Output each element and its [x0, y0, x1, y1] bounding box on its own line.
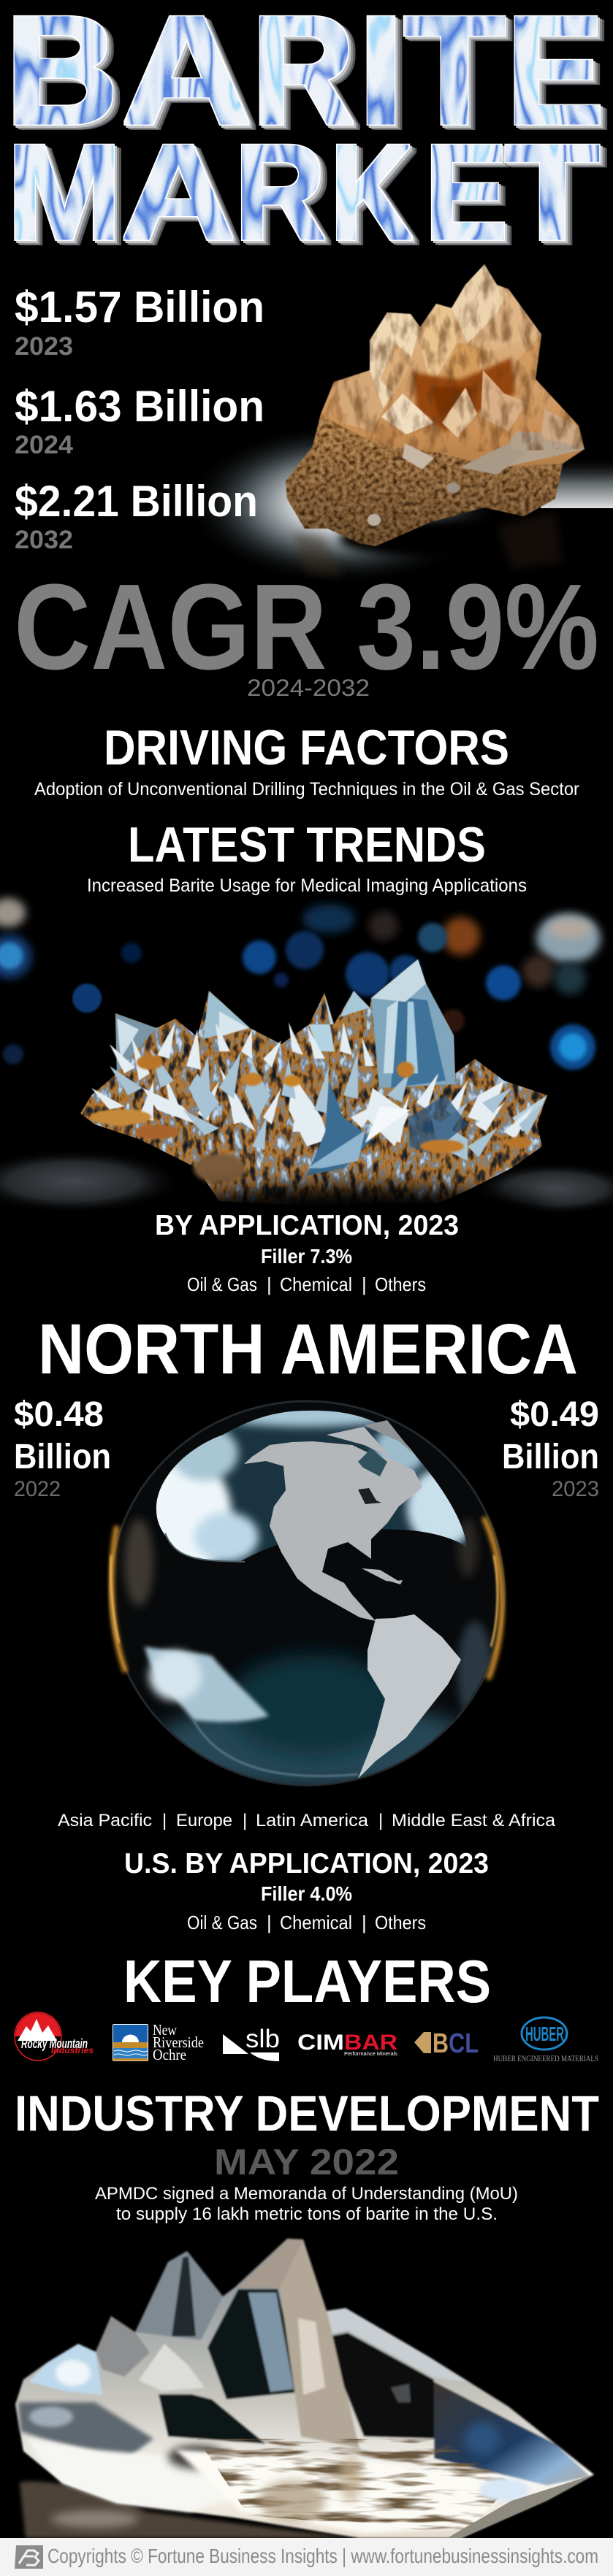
U.S. by application 2023: | — [362, 1912, 367, 1933]
logo: New Riverside Ochre: New — [153, 2021, 178, 2039]
title: Barite Market — [5, 0, 604, 268]
driving factors — [34, 720, 579, 800]
value: North America 2022 — [14, 1395, 111, 1501]
footer logo — [15, 2545, 43, 2569]
by application 2023 — [155, 1210, 459, 1295]
by application 2023: Oil & Gas — [187, 1273, 257, 1295]
value: 2023: 2023 — [15, 332, 73, 361]
logo: Rocky Mountain Industries: Rocky Mountain — [21, 2036, 88, 2051]
regions list: Middle East & Africa — [392, 1811, 556, 1831]
value: 2024 — [15, 382, 264, 459]
by application 2023: | — [267, 1273, 272, 1295]
logo: Cimbar: Performance Minerals — [344, 2052, 398, 2057]
value: North America 2023: Billion — [502, 1438, 599, 1476]
logo: Cimbar: CIM — [297, 2031, 344, 2055]
by application 2023: Filler 7.3% — [261, 1245, 352, 1268]
regions list — [58, 1811, 556, 1831]
logo: Rocky Mountain Industries: Industries — [51, 2045, 94, 2055]
value: 2023 — [15, 283, 264, 361]
title: Barite Market: E — [425, 118, 508, 268]
value: North America 2022: $0.48 — [14, 1395, 104, 1434]
image: orange barite crystal on rock — [186, 264, 613, 584]
logo: Rocky Mountain Industries — [15, 2012, 94, 2061]
logo: Cimbar — [297, 2031, 398, 2057]
U.S. by application 2023: Oil & Gas — [187, 1912, 257, 1933]
latest trends — [87, 817, 527, 896]
regions list: Latin America — [256, 1811, 369, 1831]
logo: Huber Engineered Materials — [493, 2017, 598, 2063]
development description: APMDC signed a Memoranda of Understanding (MoU) — [95, 2184, 518, 2204]
regions list: | — [162, 1811, 167, 1831]
U.S. by application 2023: U.S. BY APPLICATION, 2023 — [124, 1848, 489, 1879]
regions list: Europe — [176, 1811, 232, 1831]
value: 2032: $2.21 Billion — [15, 477, 258, 526]
by application 2023: Chemical — [280, 1273, 352, 1295]
logo: Huber Engineered Materials: HUBER — [525, 2023, 564, 2045]
latest trends: Increased Barite Usage for Medical Imaging Applications — [87, 875, 527, 896]
value: North America 2022: Billion — [14, 1438, 111, 1476]
title: Barite Market: K — [331, 118, 412, 268]
value: 2023: $1.57 Billion — [15, 283, 264, 331]
U.S. by application 2023 — [124, 1848, 489, 1933]
market size values — [15, 283, 264, 554]
value: North America 2023: 2023 — [552, 1477, 599, 1501]
development description — [95, 2184, 518, 2224]
value: North America 2022: 2022 — [14, 1477, 61, 1501]
U.S. by application 2023: Others — [375, 1912, 426, 1933]
logo: SLB: slb — [245, 2025, 280, 2053]
logo: BCL: CL — [449, 2028, 479, 2059]
value: 2032: 2032 — [15, 526, 73, 554]
U.S. by application 2023: Chemical — [280, 1912, 352, 1933]
U.S. by application 2023: | — [267, 1912, 272, 1933]
logos — [15, 2012, 598, 2063]
by application 2023: Others — [375, 1273, 426, 1295]
map: North America — [244, 1420, 422, 1621]
value: 2032 — [15, 477, 258, 554]
image: clear barite crystal — [15, 2239, 594, 2538]
logo: BCL: B — [433, 2028, 449, 2059]
title: Barite Market: R — [235, 118, 325, 268]
image: glass globe with the Americas — [110, 1401, 504, 1789]
image: blue crystal cluster with bokeh — [0, 898, 613, 1241]
title: Barite Market: M — [7, 118, 122, 268]
U.S. by application 2023: Filler 4.0% — [261, 1882, 352, 1905]
logo: New Riverside Ochre — [113, 2021, 204, 2063]
title: Barite Market: A — [121, 118, 235, 268]
by application 2023: BY APPLICATION, 2023 — [155, 1210, 459, 1241]
value: North America 2023 — [502, 1395, 599, 1501]
value: 2024: $1.63 Billion — [15, 382, 264, 431]
regions list: Asia Pacific — [58, 1811, 152, 1831]
by application 2023: | — [362, 1273, 367, 1295]
date: May 2022: MAY 2022 — [214, 2142, 399, 2182]
key players heading: KEY PLAYERS — [123, 1947, 491, 2015]
development description: to supply 16 lakh metric tons of barite in the U.S. — [116, 2204, 498, 2224]
latest trends: LATEST TRENDS — [128, 817, 486, 873]
map: South America — [358, 1614, 461, 1779]
logo: SLB — [223, 2025, 280, 2061]
logo: New Riverside Ochre: Ochre — [153, 2046, 186, 2063]
CAGR heading: 2024-2032 — [247, 675, 370, 701]
value: North America 2023: $0.49 — [510, 1395, 599, 1434]
regions list: | — [378, 1811, 383, 1831]
driving factors: DRIVING FACTORS — [104, 720, 509, 775]
logo: BCL — [414, 2028, 479, 2059]
driving factors: Adoption of Unconventional Drilling Techniques in the Oil & Gas Sector — [34, 779, 579, 800]
title: Barite Market: T — [505, 118, 600, 268]
logo: New Riverside Ochre: Riverside — [153, 2033, 204, 2051]
regions list: | — [243, 1811, 247, 1831]
logo: Cimbar: BAR — [344, 2031, 397, 2055]
value: 2024: 2024 — [15, 431, 74, 459]
footer band — [0, 2538, 613, 2576]
